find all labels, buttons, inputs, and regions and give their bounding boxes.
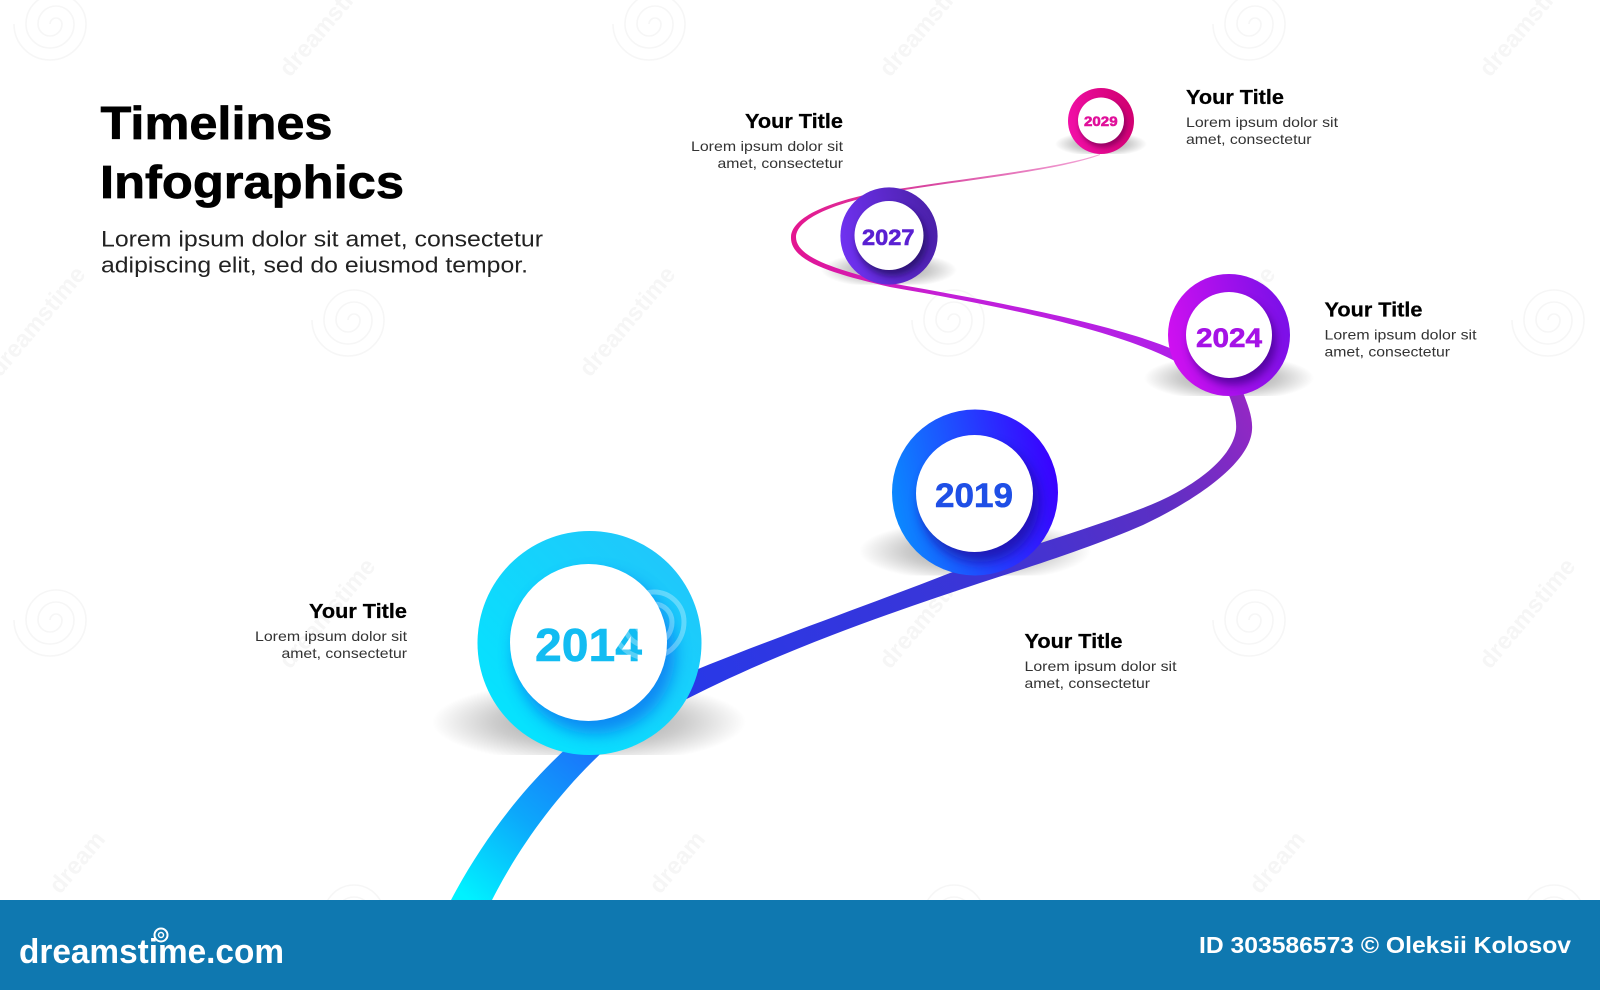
label: 2014 [255, 601, 407, 661]
label: 2024: amet, consectetur [1324, 344, 1450, 360]
subtitle text: Lorem ipsum dolor sit amet, consectetur [101, 226, 544, 252]
milestone 2027 [840, 187, 938, 285]
label: 2019: amet, consectetur [1024, 675, 1150, 691]
label: 2029: amet, consectetur [1186, 131, 1312, 147]
label: 2014: Lorem ipsum dolor sit [255, 628, 407, 644]
label: 2019 [1024, 631, 1177, 691]
ribbon segment: start to 2014 [451, 745, 610, 900]
ribbon segment: 2014 to 2024 [660, 390, 1252, 705]
title: Infographics [100, 156, 404, 208]
ribbon segment: 2024 to loop [791, 237, 1175, 361]
label: 2029: Lorem ipsum dolor sit [1186, 114, 1338, 130]
text: dream [1244, 826, 1311, 899]
text: dreamstime [874, 553, 981, 674]
title: Timelines [100, 97, 332, 149]
ribbon segment: loop to 2029 [791, 154, 1100, 237]
milestone 2014: 2014 [535, 619, 642, 671]
subtitle text: adipiscing elit, sed do eiusmod tempor. [101, 252, 528, 278]
label: 2027: Lorem ipsum dolor sit [691, 138, 843, 154]
text: dream [44, 826, 111, 899]
milestone 2024: 2024 [1196, 323, 1262, 353]
label: 2024 [1324, 300, 1477, 360]
label: 2019: Your Title [1024, 631, 1122, 653]
label: 2027: amet, consectetur [718, 155, 843, 171]
text: dream [644, 826, 711, 899]
title [100, 97, 404, 208]
milestone 2027: 2027 [862, 225, 914, 250]
label: 2029: Your Title [1186, 87, 1284, 109]
label: 2019: Lorem ipsum dolor sit [1024, 658, 1177, 674]
milestone 2024 [1168, 274, 1290, 396]
text: dreamstime [274, 553, 381, 674]
label: 2027 [691, 111, 843, 171]
milestone 2019 [892, 410, 1058, 576]
label: 2014: Your Title [309, 601, 407, 623]
text: dreamstime [574, 261, 681, 382]
footer credit: ID 303586573 © Oleksii Kolosov [1199, 932, 1571, 958]
circle ground shadows [432, 132, 1314, 764]
text: dreamstime [1474, 553, 1581, 674]
milestone 2029 [1068, 88, 1134, 154]
footer band [0, 900, 1600, 990]
label: 2024: Your Title [1324, 300, 1422, 322]
text: dreamstime [1174, 261, 1281, 382]
label: 2027: Your Title [745, 111, 843, 133]
subtitle text [101, 226, 544, 278]
label: 2024: Lorem ipsum dolor sit [1324, 326, 1477, 342]
label: 2014: amet, consectetur [282, 645, 407, 661]
milestone 2029: 2029 [1084, 113, 1118, 129]
label: 2029 [1186, 87, 1338, 147]
milestone 2014 [478, 531, 702, 755]
milestone 2019: 2019 [935, 477, 1013, 515]
footer logo: dreamstime.com [19, 933, 284, 971]
timeline ribbon [451, 154, 1252, 900]
